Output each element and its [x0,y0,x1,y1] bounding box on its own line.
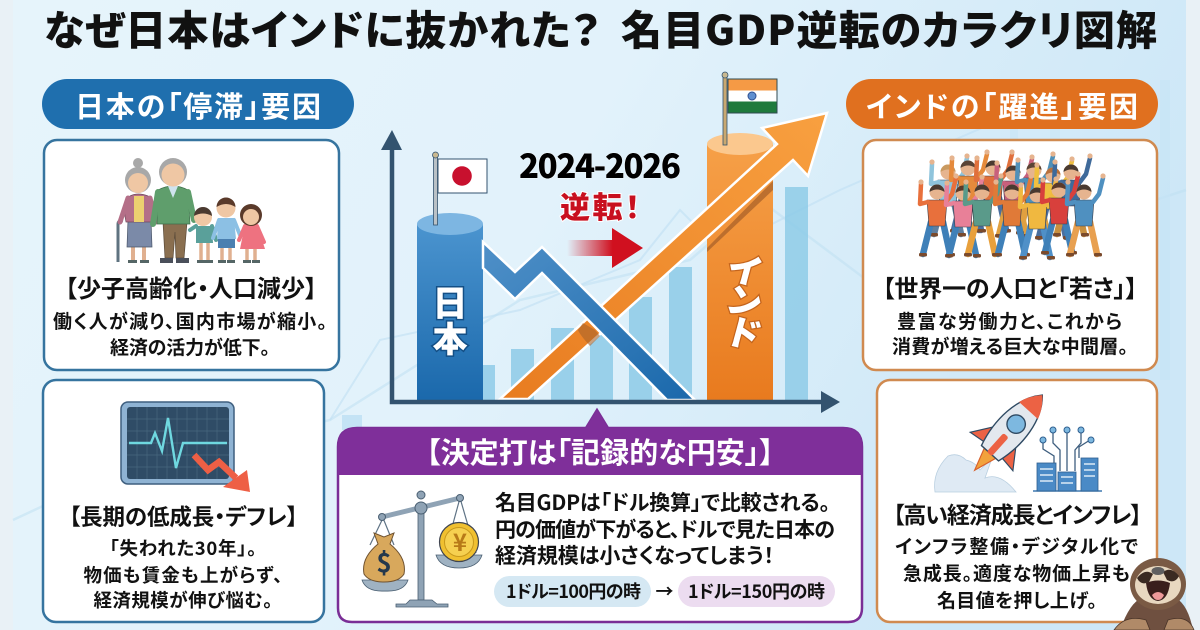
heading: growth: 【高い経済成長とインフレ】 [893,496,1142,530]
text: low growth body: 「失われた30年」。 [110,535,256,561]
heading: low growth: 【長期の低成長・デフレ】 [69,500,298,532]
text: aging body: 経済の活力が低下。 [110,333,270,360]
label: Japan [432,276,468,363]
icon: cheering crowd [918,149,1106,260]
cylinder: India [707,133,773,402]
text: growth body: インフラ整備・デジタル化で [895,532,1138,559]
text: population body: 豊富な労働力と、これから [897,307,1122,334]
axes [381,130,840,413]
arrow: red reversal [567,228,643,268]
text: low growth body [84,535,282,613]
panel: high growth and inflation [877,376,1157,622]
label: Japan: 本 [432,312,468,363]
text: low growth body: 経済規模が伸び悩む。 [94,587,272,613]
label: year range: 2024-2026 [519,140,681,188]
label: Japan: 日 [432,276,468,327]
label: India [723,239,767,361]
icon: monitor with falling arrow [121,402,250,492]
text: weak yen explanation: 経済規模は小さくなってしまう！ [495,540,774,570]
callout: 100 yen per dollar: 1ドル=100円の時 [506,578,641,604]
heading: Japan stagnation factors [42,79,354,129]
panel: low growth and deflation [43,380,324,622]
flag: India [722,72,777,145]
callout: 150 yen per dollar: 1ドル=150円の時 [688,578,825,604]
heading: India rise factors: インドの「躍進」要因 [866,84,1138,126]
text: growth body [895,532,1138,613]
icon: sloth mascot [1114,558,1194,630]
label: reversal: 逆転！ [560,183,640,227]
cylinder: Japan [417,213,483,402]
arrow: exchange rate change: → [656,578,674,604]
text: low growth body: 物価も賃金も上がらず、 [84,562,282,588]
flag: Japan [432,152,487,225]
text: growth body: 急成長。適度な物価上昇も [903,559,1130,586]
label: India: ン [723,271,767,329]
text: aging body: 働く人が減り、国内市場が縮小。 [53,307,327,334]
label: India: ド [723,303,766,361]
icon: balance scale: $ [376,543,392,580]
panel: aging and population decline [44,140,339,370]
text: weak yen explanation: 円の価値が下がると、ドルで見た日本の [495,514,835,544]
label: India: イ [723,239,767,297]
chart: GDP reversal [381,72,840,413]
arrow: Japan falling [483,242,695,400]
icon: balance scale [362,491,482,607]
icon: elderly couple and children [118,158,265,263]
heading: weak yen: 【決定打は「記録的な円安」】 [426,430,774,472]
text: aging body [53,307,327,360]
text: weak yen explanation [495,487,835,570]
heading: population: 【世界一の人口と「若さ」】 [882,269,1138,304]
arrow: India rising [500,113,827,399]
title [44,0,1157,57]
icon: rocket and digital city [935,376,1102,492]
text: growth body: 名目値を押し上げ。 [937,586,1097,613]
panel: decisive factor weak yen [338,410,862,622]
text: population body [892,307,1128,359]
text: weak yen explanation: 名目GDPは「ドル換算」で比較される。 [495,487,830,517]
heading: aging: 【少子高齢化・人口減少】 [65,269,317,304]
panel: world's largest population and youth [863,140,1157,370]
heading: Japan stagnation factors: 日本の「停滞」要因 [75,84,321,126]
background bars [483,187,808,402]
icon: balance scale: ¥ [453,523,467,558]
text: population body: 消費が増える巨大な中間層。 [892,332,1128,359]
